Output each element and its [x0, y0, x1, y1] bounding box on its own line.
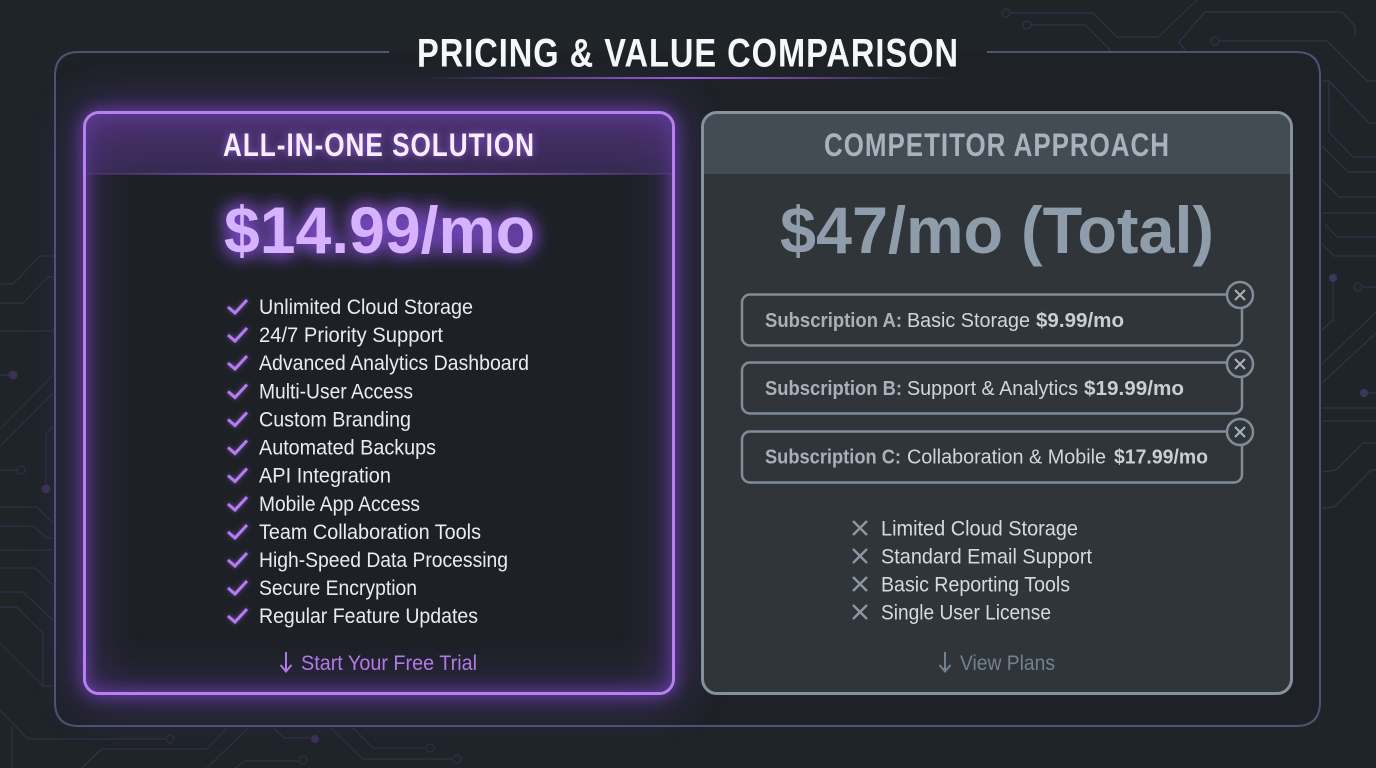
limitations list: Standard Email Support	[881, 546, 1092, 568]
title: PRICING & VALUE COMPARISON	[417, 32, 959, 76]
feature checklist: Unlimited Cloud Storage	[259, 296, 473, 319]
subscription A: Subscription A:	[765, 309, 902, 332]
panel heading: COMPETITOR APPROACH	[824, 127, 1170, 163]
price: $47/mo (Total)	[780, 193, 1214, 267]
subscription A: $9.99/mo	[1036, 309, 1124, 332]
feature checklist: Mobile App Access	[259, 493, 420, 516]
call to action: view plans: View Plans	[960, 652, 1055, 675]
subscription C	[742, 419, 1253, 482]
subscription B: $19.99/mo	[1084, 377, 1184, 400]
call to action: start your free trial: Start Your Free Trial	[301, 652, 477, 675]
limitations list: Limited Cloud Storage	[881, 518, 1078, 540]
panel header band	[704, 114, 1290, 174]
feature checklist: Regular Feature Updates	[259, 605, 478, 628]
panel: competitor approach	[701, 111, 1293, 695]
subscription C: Subscription C:	[765, 446, 901, 468]
subscription A	[742, 282, 1253, 346]
limitations list: Basic Reporting Tools	[881, 574, 1070, 596]
subscription B	[742, 351, 1253, 414]
feature checklist: High-Speed Data Processing	[259, 549, 508, 572]
panel header band	[86, 114, 672, 174]
feature checklist: Secure Encryption	[259, 577, 417, 600]
feature checklist: Automated Backups	[259, 436, 436, 460]
feature checklist: API Integration	[259, 464, 391, 488]
feature checklist: Advanced Analytics Dashboard	[259, 352, 529, 375]
subscription C: Collaboration & Mobile	[907, 446, 1106, 468]
price: $14.99/mo	[224, 193, 535, 267]
subscription C: $17.99/mo	[1114, 446, 1208, 468]
feature checklist: Multi-User Access	[259, 380, 413, 404]
panel: all-in-one solution	[83, 111, 675, 695]
feature checklist: Team Collaboration Tools	[259, 521, 481, 544]
feature checklist: Custom Branding	[259, 408, 411, 432]
panel heading: ALL-IN-ONE SOLUTION	[223, 127, 535, 163]
feature checklist: 24/7 Priority Support	[259, 324, 443, 347]
subscription B: Support & Analytics	[907, 377, 1078, 400]
subscription B: Subscription B:	[765, 377, 902, 400]
subscription A: Basic Storage	[907, 309, 1030, 332]
feature checklist	[228, 296, 529, 628]
limitations list	[853, 518, 1092, 624]
limitations list: Single User License	[881, 602, 1051, 624]
